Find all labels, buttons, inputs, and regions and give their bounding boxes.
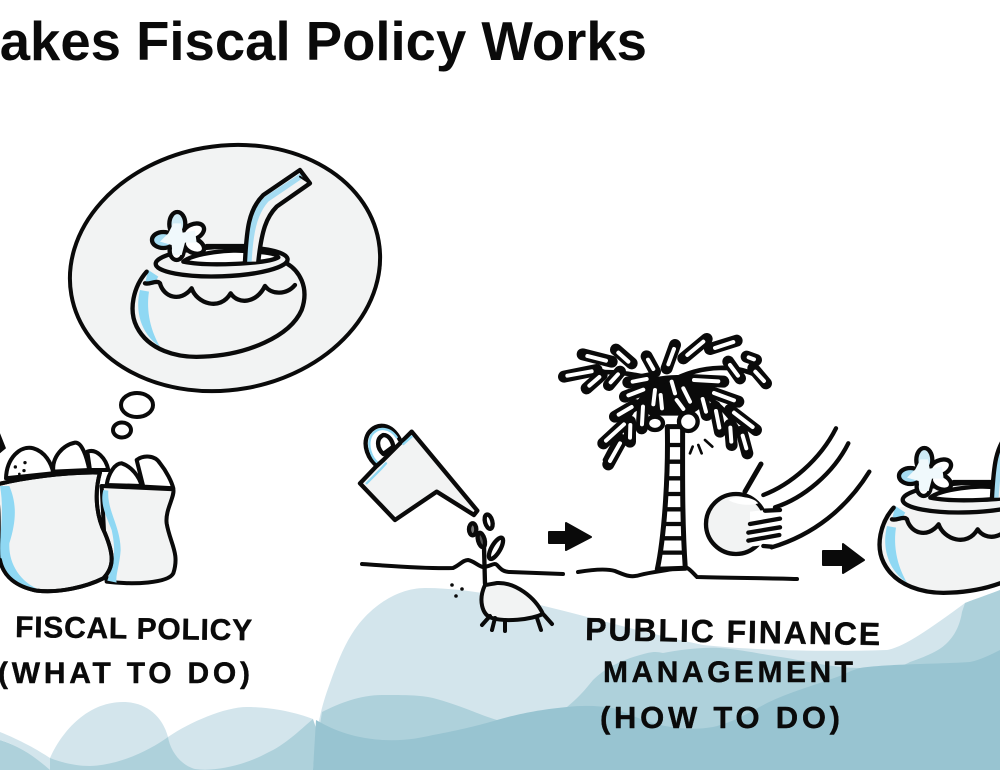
arrow: tree to coconut drink [823,544,864,573]
label: fiscal policy: FISCAL POLICY [15,611,252,647]
icon: coconut drink in bubble [133,170,310,357]
icon: coconut drink result [880,406,1000,593]
water drops and sprout [469,514,506,561]
background waves [0,588,1000,770]
title: akes Fiscal Policy Works [0,11,647,72]
label: how to do: (HOW TO DO) [600,700,840,735]
ground line left [362,560,563,574]
icon: sprouting seed with roots [450,583,552,631]
icon: palm tree trunk [657,427,685,569]
icon: sacks of coconuts [0,433,176,591]
icon: palm tree fronds [564,339,767,464]
arrow: seed to tree [549,523,591,550]
label: public finance: PUBLIC FINANCE [585,611,880,652]
icon: watering can [360,426,506,583]
thought bubble [50,121,400,437]
ground line right [578,567,797,579]
label: what to do: (WHAT TO DO) [0,657,250,690]
label: management: MANAGEMENT [603,656,853,689]
icon: hand holding coconut [706,428,869,554]
